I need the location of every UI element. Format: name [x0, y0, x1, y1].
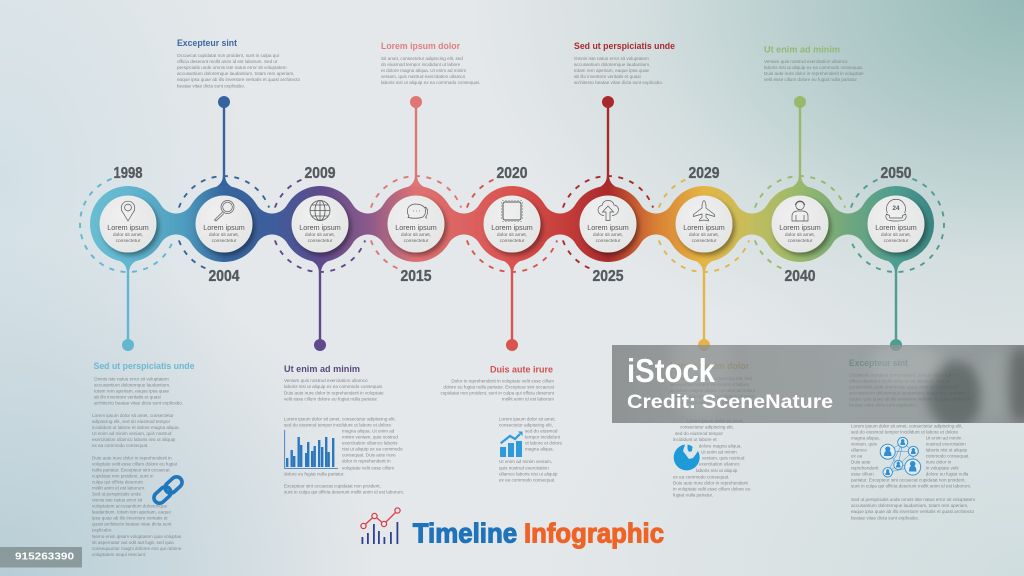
- icon: cloud upload: [598, 200, 618, 220]
- text block: Duis aute irure: cupidatat non proident, sunt in culpa qui officia deserunt: [440, 390, 555, 396]
- text block: Lorem ipsum dolor top: Sit amet, consectetur adipiscing elit, sed: [381, 56, 463, 61]
- text block: Duis aute irure: sed do eiusmod: [525, 428, 558, 434]
- text block: Excepteur sint bottom: ex ea: [851, 454, 863, 458]
- node 6: consectetur: [596, 238, 621, 244]
- text block: Sed ut perspiciatis top: architecto beatae vitae dicta sunt explicabo.: [574, 80, 663, 85]
- text block: Duis aute irure: tempor incididunt: [525, 434, 561, 440]
- text block: Excepteur sint bottom: eaque ipsa quae ab illo inventore veritatis et quasi architecto: [849, 396, 973, 402]
- text block: Lorem ipsum dolor bottom: Lorem ipsum dolor: [670, 361, 749, 372]
- text block: Ut enim ad minim top: [764, 44, 864, 82]
- text block: Lorem ipsum dolor bottom: Sit amet, consectetur adipiscing elit, sed: [670, 376, 752, 381]
- text block: Sed ut perspiciatis bottom: laudantium, totam rem aperiam, eaque: [92, 510, 171, 514]
- text block: Sed ut perspiciatis bottom: ipsa quae ab illo inventore veritatis et: [92, 516, 168, 520]
- node 9: Lorem ipsum: [875, 223, 917, 232]
- node 8: Lorem ipsum: [779, 223, 821, 232]
- text block: Lorem ipsum dolor bottom: consectetur adipiscing elit,: [680, 424, 734, 430]
- text block: Lorem ipsum dolor bottom: Lorem ipsum dolor sit amet,: [687, 418, 744, 424]
- text block: Duis aute irure: Ut enim ad minim veniam,: [499, 459, 552, 464]
- text block: Sed ut perspiciatis bottom: quasi architecto beatae vitae dicta sunt: [92, 522, 172, 526]
- text block: Ut enim ad minim bottom: nisi ut aliquip ex ea commodo: [342, 446, 403, 452]
- node 1: [100, 196, 156, 252]
- node 7: [676, 196, 732, 252]
- title: Timeline: [413, 518, 517, 549]
- text block: Lorem ipsum dolor bottom: fugiat nulla pariatur.: [673, 492, 713, 498]
- text block: Excepteur sint bottom: accusantium doloremque laudantium, totam rem aperiam,: [851, 503, 968, 508]
- text block: Excepteur sint bottom: laboris nisi ut aliquip: [926, 448, 968, 452]
- node 3: dolor sit amet,: [305, 232, 335, 238]
- text block: Sed ut perspiciatis bottom: voluptatem sequi nesciunt.: [92, 552, 146, 557]
- icon: people network: [880, 437, 921, 477]
- text block: Sed ut perspiciatis bottom: Omnis iste natus error sit voluptatem: [94, 376, 169, 382]
- text block: Excepteur sint bottom: sunt in culpa qui officia deserunt mollit anim id est laborum.: [851, 484, 971, 488]
- node 6: dolor sit amet,: [593, 232, 623, 238]
- text block: Excepteur sint bottom: eaque ipsa quae ab illo inventore veritatis et quasi architecto: [851, 509, 975, 514]
- text block: Ut enim ad minim bottom: velit esse cillum dolore eu fugiat nulla pariatur.: [284, 396, 378, 402]
- node 3: consectetur: [308, 238, 333, 244]
- node 6: [580, 196, 636, 252]
- text block: Ut enim ad minim bottom: dolor in reprehenderit in: [342, 458, 391, 464]
- text block: Ut enim ad minim top: velit esse cillum dolore eu fugiat nulla pariatur.: [764, 77, 858, 82]
- stem: 2040: [792, 96, 808, 187]
- text block: Lorem ipsum dolor bottom: exercitation ullamco: [699, 462, 740, 466]
- text block: Sed ut perspiciatis bottom: explicabo.: [92, 528, 113, 532]
- text block: Lorem ipsum dolor bottom: incididunt ut labore et: [673, 437, 717, 442]
- node 7: dolor sit amet,: [689, 232, 719, 238]
- text block: Sed ut perspiciatis bottom: exercitation ullamco laboris nisi ut aliquip: [92, 437, 176, 442]
- text block: Duis aute irure: Dolor in reprehenderit in voluptate velit esse cillum: [451, 378, 554, 384]
- text block: Lorem ipsum dolor top: et dolore magna aliqua. Ut enim ad minim: [381, 68, 466, 73]
- text block: Excepteur sint bottom: Duis aute: [851, 460, 871, 464]
- node 2: dolor sit amet,: [209, 232, 239, 238]
- text block: Excepteur sint top: accusantium doloremque laudantium, totam rem aperiam,: [177, 71, 294, 76]
- text block: Excepteur sint bottom: Sed ut perspiciatis unde omnis iste natus error sit voluptatem: [851, 497, 975, 502]
- year labels: 2004: [208, 268, 240, 285]
- icon: support agent: [792, 201, 808, 221]
- text block: Sed ut perspiciatis bottom: totam rem aperiam, eaque ipsa quae: [94, 388, 170, 394]
- text block: Duis aute irure: dolore eu fugiat nulla pariatur. Excepteur sint occaecat: [443, 384, 555, 390]
- stem: 1998: [120, 261, 136, 351]
- text block: Sed ut perspiciatis bottom: architecto beatae vitae dicta sunt explicabo.: [94, 400, 183, 406]
- text block: Excepteur sint top: perspiciatis unde omnis iste natus error sit voluptatem: [177, 65, 287, 70]
- text block: Ut enim ad minim bottom: sunt in culpa qui officia deserunt mollit anim id est laborum.: [284, 490, 404, 494]
- text block: Ut enim ad minim bottom: Veniam quis nostrud exercitation ullamco: [284, 378, 368, 383]
- text block: Duis aute irure: ullamco laboris nisi ut aliquip: [499, 472, 558, 476]
- text block: Lorem ipsum dolor bottom: do eiusmod tempor incididunt ut labore: [670, 382, 750, 387]
- text block: Excepteur sint bottom: in voluptate velit: [926, 466, 959, 470]
- text block: Sed ut perspiciatis bottom: ex ea commodo consequat.: [92, 443, 148, 448]
- text block: Sed ut perspiciatis top: totam rem aperiam, eaque ipsa quae: [574, 68, 650, 73]
- text block: Lorem ipsum dolor top: do eiusmod tempor incididunt ut labore: [381, 62, 461, 67]
- text block: Sed ut perspiciatis bottom: Ut enim ad minim veniam, quis nostrud: [92, 431, 172, 436]
- year labels: [114, 165, 912, 285]
- text block: Excepteur sint bottom: Lorem ipsum dolor sit amet, consectetur adipiscing elit,: [851, 424, 963, 428]
- text block: Excepteur sint top: eaque ipsa quae ab illo inventore veritatis et quasi architecto: [177, 77, 301, 82]
- node 1: dolor sit amet,: [113, 232, 143, 238]
- year labels: 1998: [114, 165, 143, 182]
- text block: Sed ut perspiciatis bottom: Nemo enim ipsam voluptatem quia voluptas: [92, 534, 182, 539]
- text block: Excepteur sint bottom: esse cillum: [851, 472, 874, 476]
- text block: Sed ut perspiciatis bottom: mollit anim id est laborum.: [92, 486, 145, 490]
- icon: map pin: [121, 201, 135, 221]
- stem: 2029: [696, 261, 712, 351]
- text block: Ut enim ad minim bottom: laboris nisi ut aliquip ex ea commodo consequat.: [284, 384, 383, 389]
- text block: Excepteur sint bottom: ullamco: [851, 448, 867, 452]
- text block: Ut enim ad minim bottom: voluptate velit esse cillum: [342, 466, 394, 470]
- title icon: [361, 508, 400, 544]
- text block: Ut enim ad minim bottom: dolore eu fugiat nulla pariatur.: [284, 472, 345, 476]
- text block: Lorem ipsum dolor bottom: Duis aute irure dolor in reprehenderit: [673, 480, 749, 486]
- node 2: Lorem ipsum: [203, 223, 245, 232]
- node discs: [100, 196, 924, 252]
- node 7: consectetur: [692, 238, 717, 244]
- text block: Ut enim ad minim bottom: Ut enim ad minim: [284, 364, 360, 375]
- node 1: consectetur: [116, 238, 141, 244]
- text block: Sed ut perspiciatis bottom: incididunt ut labore et dolore magna aliqua.: [92, 425, 180, 430]
- text block: Sed ut perspiciatis bottom: accusantium doloremque laudantium,: [94, 382, 170, 388]
- text block: Duis aute irure: consectetur adipiscing elit,: [499, 422, 553, 428]
- text block: Excepteur sint top: Occaecat cupidatat non proident, sunt in culpa qui: [177, 53, 279, 58]
- text block: Lorem ipsum dolor top: [381, 41, 480, 85]
- text block: Excepteur sint bottom: beatae vitae dicta sunt explicabo.: [849, 402, 917, 408]
- timeline ribbon: [90, 186, 934, 262]
- text block: Excepteur sint bottom: sed do eiusmod tempor incididunt ut labore et dolore: [851, 430, 958, 434]
- text block: Excepteur sint bottom: dolore eu fugiat nulla: [926, 472, 969, 476]
- node 4: dolor sit amet,: [401, 232, 431, 238]
- text block: Sed ut perspiciatis bottom: voluptate velit esse cillum dolore eu fugiat: [92, 462, 178, 466]
- text block: Sed ut perspiciatis bottom: Sed ut perspiciatis unde: [92, 492, 141, 496]
- node 7: Lorem ipsum: [683, 223, 725, 232]
- node 2: consectetur: [212, 238, 237, 244]
- node 1: Lorem ipsum: [107, 223, 149, 232]
- text block: Ut enim ad minim bottom: Excepteur sint occaecat cupidatat non proident,: [284, 484, 381, 488]
- node 4: [388, 196, 444, 252]
- text block: Duis aute irure: [440, 364, 562, 482]
- node 6: Lorem ipsum: [587, 223, 629, 232]
- text block: Sed ut perspiciatis top: ab illo inventore veritatis et quasi: [574, 74, 641, 79]
- node 2: [196, 196, 252, 252]
- text block: Excepteur sint bottom: accusantium doloremque laudantium, totam rem aperiam,: [849, 390, 966, 396]
- text block: Excepteur sint bottom: beatae vitae dicta sunt explicabo.: [851, 516, 919, 520]
- node 9: [868, 196, 924, 252]
- node 4: Lorem ipsum: [395, 223, 437, 232]
- node 5: [484, 196, 540, 252]
- watermark banner: [612, 320, 1024, 429]
- year labels: 2025: [592, 268, 624, 285]
- text block: Duis aute irure: Duis aute irure: [490, 364, 553, 376]
- icon: globe: [310, 200, 330, 220]
- node 5: dolor sit amet,: [497, 232, 527, 238]
- node 8: dolor sit amet,: [785, 232, 815, 238]
- text block: Sed ut perspiciatis bottom: [92, 361, 194, 557]
- text block: Excepteur sint bottom: magna aliqua.: [851, 436, 880, 440]
- text block: Excepteur sint top: beatae vitae dicta sunt explicabo.: [177, 84, 245, 88]
- text block: Ut enim ad minim bottom: Duis aute irure dolor in reprehenderit in voluptate: [284, 390, 384, 396]
- year labels: 2015: [400, 268, 432, 285]
- text block: Lorem ipsum dolor top: veniam, quis nostrud exercitation ullamco: [381, 74, 466, 79]
- text block: Sed ut perspiciatis bottom: Duis aute irure dolor in reprehenderit in: [92, 456, 172, 460]
- icon: pie chart: [674, 444, 700, 470]
- text block: Excepteur sint bottom: pariatur. Excepteur sint occaecat cupidatat non proident,: [851, 478, 966, 482]
- text block: Duis aute irure: Lorem ipsum dolor sit amet,: [499, 416, 556, 422]
- text block: Ut enim ad minim top: Veniam quis nostrud exercitation ullamco: [764, 59, 848, 64]
- text block: Lorem ipsum dolor bottom: sed do eiusmod tempor: [675, 431, 723, 436]
- text block: Ut enim ad minim top: laboris nisi ut aliquip ex ea commodo consequat.: [764, 65, 863, 70]
- text block: Duis aute irure: magna aliqua.: [525, 446, 554, 452]
- text block: Sed ut perspiciatis bottom: nulla pariatur. Excepteur sint occaecat: [92, 468, 170, 472]
- year labels: 2050: [880, 165, 912, 182]
- bar chart: [285, 430, 338, 468]
- text block: Lorem ipsum dolor bottom: laboris nisi ut aliquip ex ea commodo consequat.: [670, 400, 769, 405]
- icon: magnifier: [214, 200, 234, 221]
- node 8: consectetur: [788, 238, 813, 244]
- text block: Sed ut perspiciatis bottom: ab illo inventore veritatis et quasi: [94, 394, 161, 400]
- text block: Excepteur sint bottom: veniam, quis: [851, 442, 877, 446]
- stem: 2020: [504, 261, 520, 351]
- text block: Excepteur sint bottom: [849, 358, 975, 520]
- node 9: consectetur: [884, 238, 909, 244]
- text block: Duis aute irure: mollit anim id est laborum: [502, 396, 554, 402]
- icon: chain link: [152, 475, 184, 505]
- text block: Ut enim ad minim top: Ut enim ad minim: [764, 44, 840, 56]
- title: [413, 518, 664, 549]
- node 3: [292, 196, 348, 252]
- text block: Sed ut perspiciatis top: Omnis iste natus error sit voluptatem: [574, 56, 649, 61]
- node 3: Lorem ipsum: [299, 223, 341, 232]
- text block: Excepteur sint bottom: Occaecat cupidatat non proident, sunt in culpa qui: [849, 372, 951, 378]
- text block: Lorem ipsum dolor bottom: et dolore magna aliqua. Ut enim ad minim: [670, 388, 755, 393]
- stock id tag: [0, 547, 82, 568]
- node 5: consectetur: [500, 238, 525, 244]
- text block: Lorem ipsum dolor bottom: laboris nisi ut aliquip: [696, 468, 738, 473]
- stems and end dots: [120, 96, 904, 351]
- text block: Sed ut perspiciatis top: [574, 41, 675, 85]
- title: Infographic: [524, 518, 664, 549]
- text block: Excepteur sint bottom: commodo consequat.: [926, 454, 970, 458]
- text block: Duis aute irure: ex ea commodo consequat.: [499, 478, 555, 482]
- watermark banner: Credit: SceneNature: [627, 392, 833, 413]
- icon: growth bars: [500, 432, 522, 457]
- year labels: 2029: [688, 165, 720, 182]
- node 5: Lorem ipsum: [491, 223, 533, 232]
- icon: chip: [501, 200, 523, 222]
- stem: 2025: [600, 96, 616, 187]
- text block: Sed ut perspiciatis top: accusantium doloremque laudantium,: [574, 62, 650, 67]
- stock id tag: 915263390: [15, 550, 74, 562]
- text block: Sed ut perspiciatis bottom: consequuntur magni dolores eos qui ratione: [92, 546, 182, 551]
- icon: airplane: [694, 200, 714, 221]
- text block: Excepteur sint top: Excepteur sint: [177, 38, 238, 49]
- text block: Lorem ipsum dolor bottom: veniam, quis nostrud exercitation ullamco: [670, 394, 755, 399]
- text block: Excepteur sint bottom: nostrud exercitation: [926, 442, 966, 446]
- text block: Excepteur sint bottom: Ut enim ad minim: [926, 436, 962, 440]
- text block: Ut enim ad minim bottom: minim veniam, quis nostrud: [342, 434, 398, 440]
- text block: Excepteur sint bottom: Excepteur sint: [849, 358, 909, 369]
- text block: Lorem ipsum dolor bottom: Ut enim ad minim: [701, 450, 737, 454]
- dashed arcs: [80, 176, 944, 272]
- text block: Ut enim ad minim bottom: [284, 364, 404, 494]
- text block: Duis aute irure: ut labore et dolore: [525, 440, 562, 446]
- text block: Ut enim ad minim bottom: exercitation ullamco laboris: [342, 440, 398, 446]
- text block: Lorem ipsum dolor bottom: ex ea commodo consequat.: [673, 474, 729, 480]
- year labels: 2020: [496, 165, 528, 182]
- text block: Sed ut perspiciatis bottom: sit aspernatur aut odit aut fugit, sed quia: [92, 540, 174, 545]
- watermark banner: iStock: [627, 352, 716, 389]
- text block: Sed ut perspiciatis bottom: voluptatem accusantium doloremque: [92, 504, 168, 508]
- text block: Excepteur sint bottom: irure dolor in: [926, 460, 952, 464]
- text block: Excepteur sint top: [177, 38, 301, 88]
- text block: Lorem ipsum dolor bottom: [670, 361, 770, 498]
- text block: Duis aute irure: quis nostrud exercitation: [499, 466, 549, 470]
- stem: 2004: [216, 96, 232, 187]
- year labels: 2009: [304, 165, 336, 182]
- text block: Sed ut perspiciatis bottom: omnis iste natus error sit: [92, 498, 143, 502]
- stem: 2009: [312, 261, 328, 351]
- stem: 2050: [888, 261, 904, 351]
- stem: 2015: [408, 96, 424, 187]
- text block: Ut enim ad minim bottom: magna aliqua. Ut enim ad: [342, 428, 395, 434]
- text block: Ut enim ad minim bottom: Lorem ipsum dolor sit amet, consectetur adipiscing elit,: [284, 416, 396, 422]
- text block: Ut enim ad minim top: Duis aute irure dolor in reprehenderit in voluptate: [764, 71, 864, 76]
- text block: Sed ut perspiciatis bottom: culpa qui officia deserunt: [92, 480, 143, 484]
- text block: Ut enim ad minim bottom: sed do eiusmod tempor incididunt ut labore et dolore: [284, 422, 391, 428]
- text block: Excepteur sint bottom: perspiciatis unde omnis iste natus error sit voluptatem: [849, 384, 959, 390]
- text block: Sed ut perspiciatis top: Sed ut perspiciatis unde: [574, 41, 675, 52]
- icon: 24h phone: 24: [893, 205, 900, 212]
- text block: Sed ut perspiciatis bottom: Sed ut perspiciatis unde: [94, 361, 194, 372]
- node 9: dolor sit amet,: [881, 232, 911, 238]
- text block: Lorem ipsum dolor bottom: veniam, quis nostrud: [702, 456, 745, 460]
- text block: Lorem ipsum dolor bottom: dolore magna aliqua.: [699, 444, 742, 448]
- text block: Sed ut perspiciatis bottom: Lorem ipsum dolor sit amet, consectetur: [92, 413, 174, 418]
- text block: Sed ut perspiciatis bottom: adipiscing elit, sed do eiusmod tempor: [92, 419, 171, 424]
- text block: Ut enim ad minim bottom: consequat. Duis aute irure: [342, 452, 396, 458]
- text block: Sed ut perspiciatis bottom: cupidatat non proident, sunt in: [92, 474, 154, 478]
- node 8: [772, 196, 828, 252]
- node 4: consectetur: [404, 238, 429, 244]
- text block: Lorem ipsum dolor top: Lorem ipsum dolor: [381, 41, 460, 52]
- text block: Excepteur sint bottom: officia deserunt mollit anim id est laborum. Sed ut: [849, 378, 950, 384]
- text block: Lorem ipsum dolor top: laboris nisi ut aliquip ex ea commodo consequat.: [381, 80, 480, 85]
- icon: chat bubbles: [407, 204, 428, 218]
- year labels: 2040: [784, 268, 816, 285]
- text block: Excepteur sint top: officia deserunt mollit anim id est laborum. Sed ut: [177, 59, 278, 64]
- text block: Excepteur sint bottom: reprehenderit: [851, 466, 879, 470]
- text block: Lorem ipsum dolor bottom: in voluptate velit esse cillum dolore eu: [673, 486, 751, 492]
